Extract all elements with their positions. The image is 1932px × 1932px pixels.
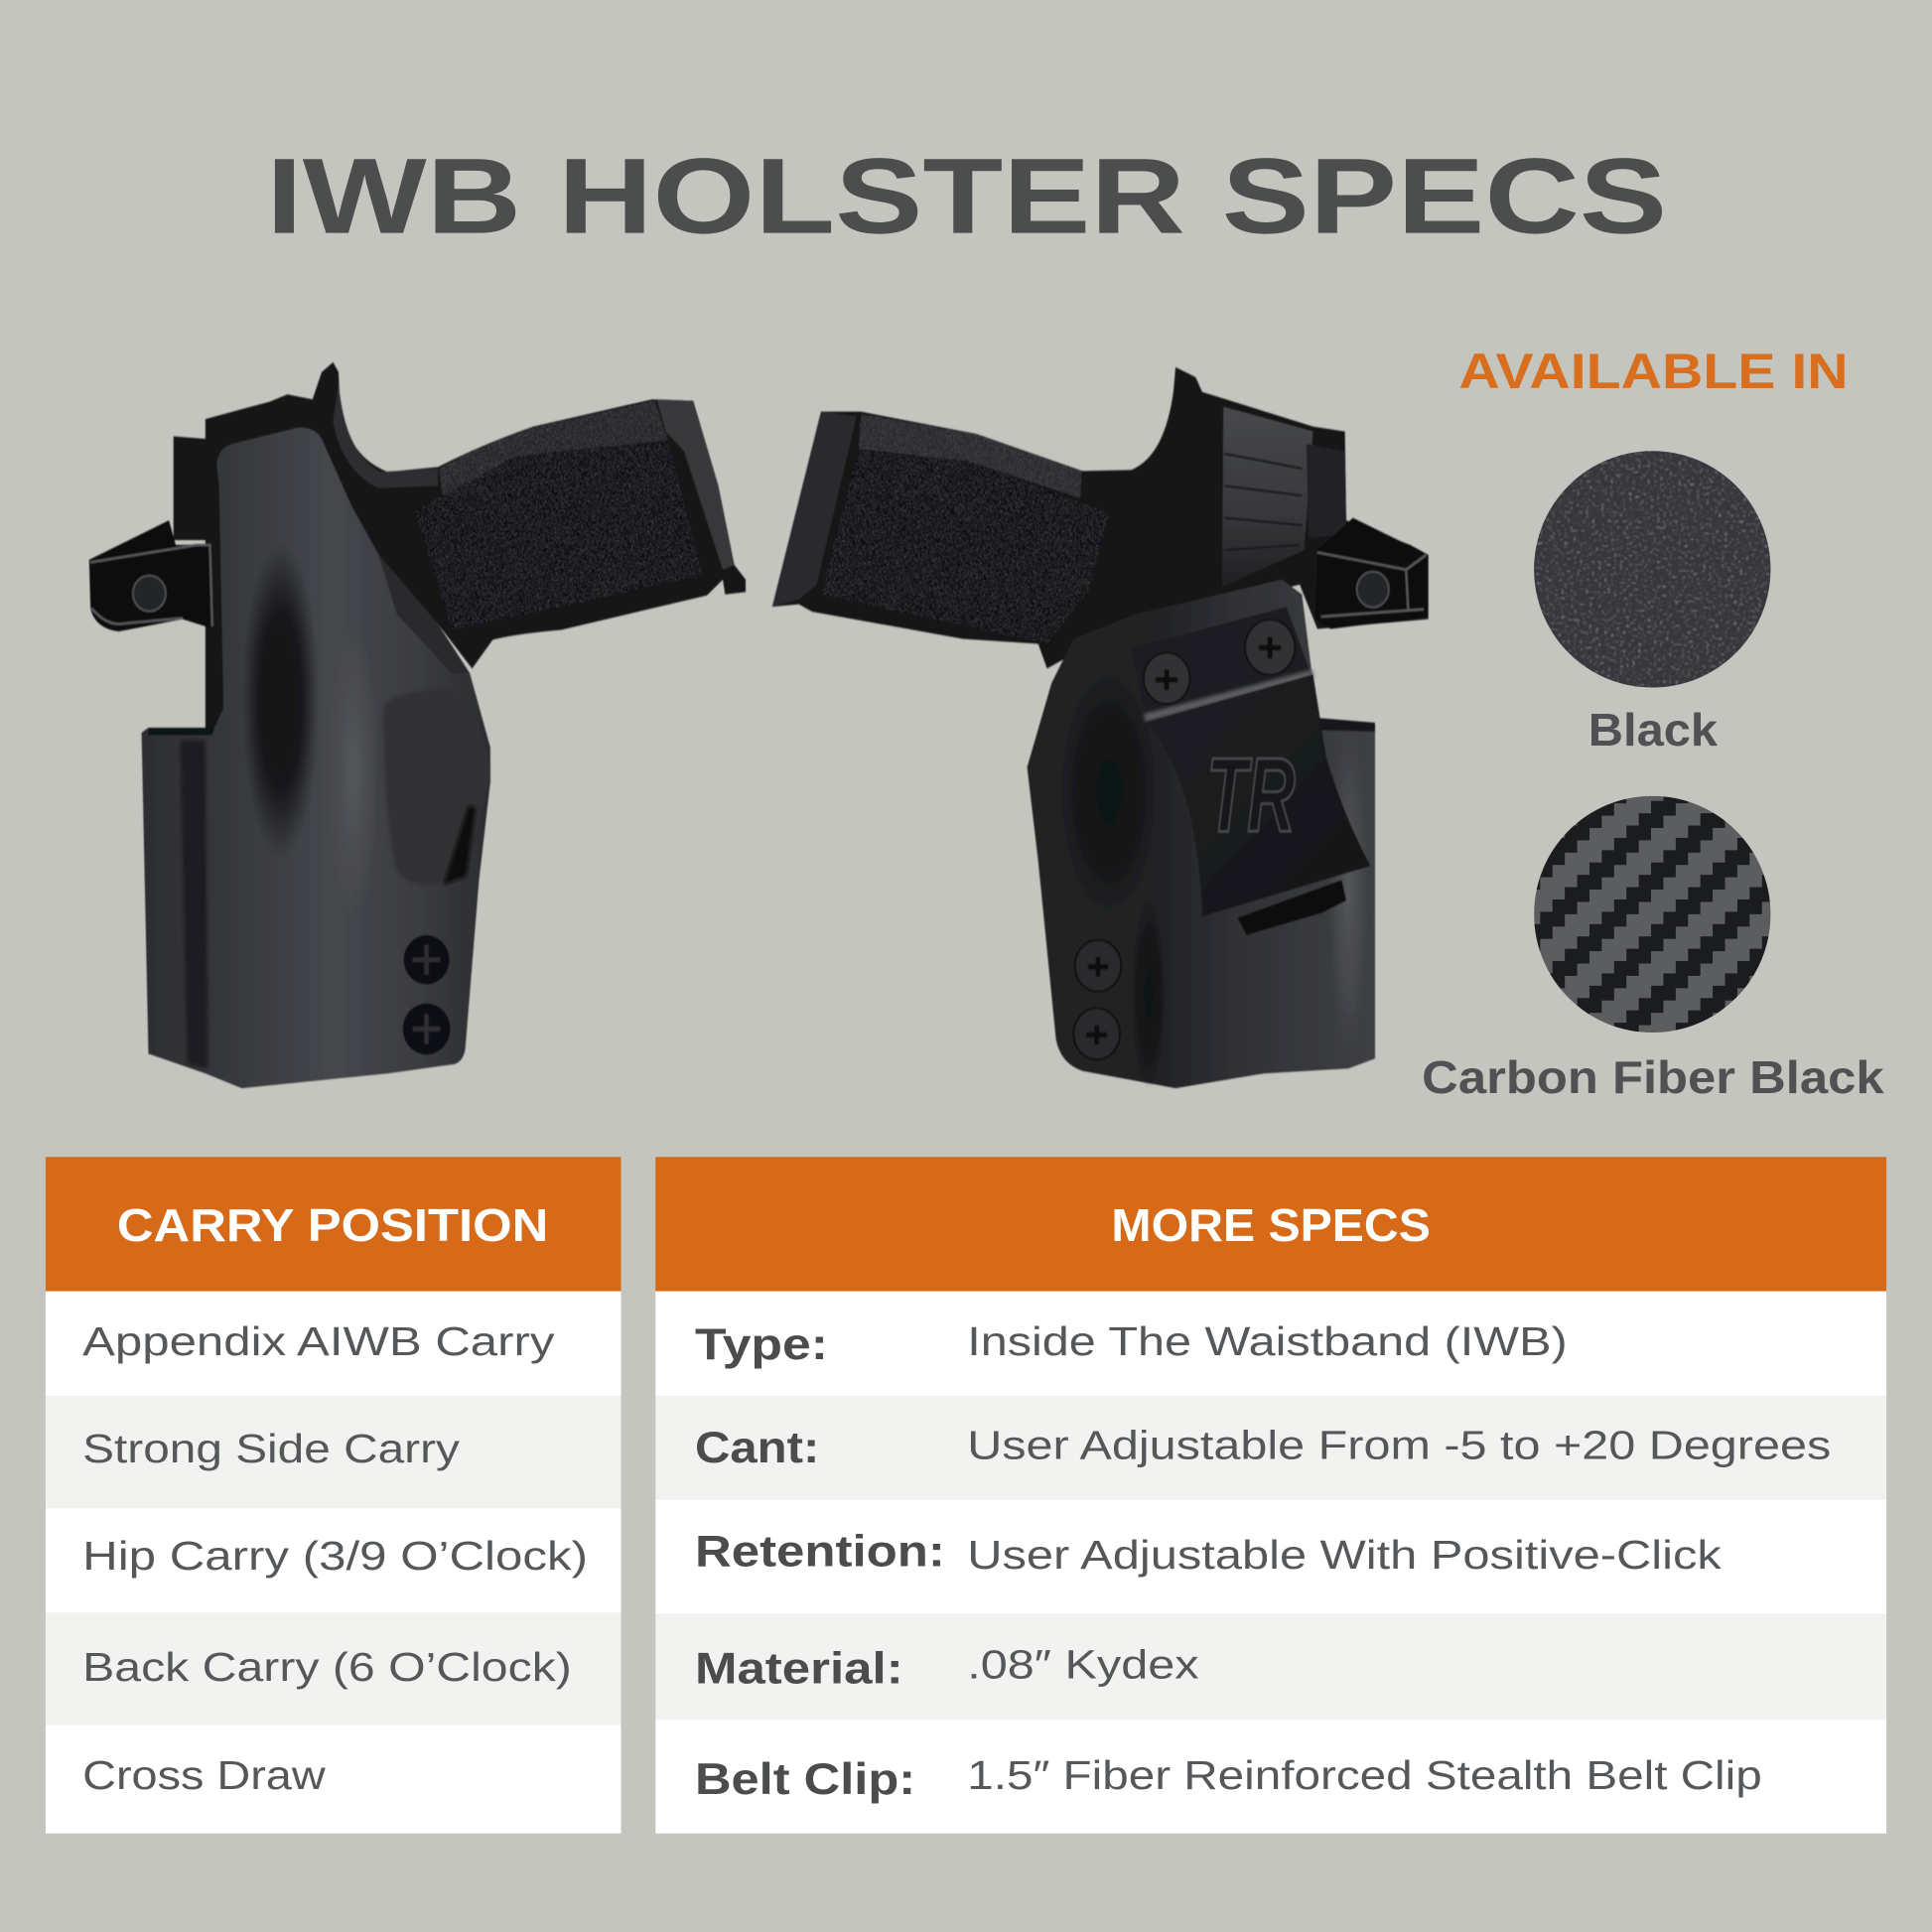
table header: more specs [655, 1157, 1886, 1292]
row: type: Inside The Waistband (IWB) [967, 1318, 1568, 1364]
table header: carry position [46, 1157, 621, 1292]
grip stippling panel [821, 450, 1109, 643]
row: type [655, 1292, 1886, 1396]
row: cant: Cant: [695, 1424, 819, 1472]
left holster and pistol: front view [89, 362, 746, 1088]
pistol slide with serrations [1222, 407, 1346, 587]
row: belt clip: Belt Clip: [695, 1755, 915, 1804]
swatch label: carbon fiber black: Carbon Fiber Black [1422, 1051, 1884, 1103]
panel: more specs table [655, 1157, 1886, 1834]
holster body [1028, 580, 1375, 1088]
row: back carry: Back Carry (6 O’Clock) [82, 1644, 572, 1690]
row: cross draw: Cross Draw [82, 1752, 326, 1798]
row: retention [655, 1499, 1886, 1614]
row: cant: User Adjustable From -5 to +20 Degrees [967, 1422, 1831, 1467]
clip slot [1238, 880, 1346, 935]
grip base plate [656, 399, 735, 570]
row: retention: Retention: [695, 1527, 945, 1576]
holster body [142, 428, 490, 1088]
table header: more specs: MORE SPECS [1111, 1199, 1431, 1251]
row: cant [655, 1396, 1886, 1499]
row: back carry [46, 1613, 621, 1725]
holster shading [1060, 673, 1375, 1088]
row: cross draw [46, 1725, 621, 1834]
row: belt clip [655, 1721, 1886, 1834]
swatch label: black: Black [1588, 704, 1719, 756]
holster screws [1073, 940, 1121, 1059]
row: appendix [46, 1292, 621, 1396]
row: material: Material: [695, 1644, 903, 1693]
holster rivets [403, 935, 450, 1054]
grip stippling panel [415, 442, 702, 630]
belt loop strap [89, 520, 213, 631]
right holster and pistol: back view with belt clip [772, 367, 1429, 1088]
grip base plate [772, 412, 857, 607]
swatch: black [1534, 451, 1770, 688]
panel: carry position table [46, 1157, 621, 1834]
title: IWB HOLSTER SPECS [266, 136, 1667, 256]
row: strong side: Strong Side Carry [82, 1426, 461, 1471]
row: belt clip: 1.5″ Fiber Reinforced Stealth Belt Clip [967, 1752, 1762, 1798]
belt clip mount [1131, 607, 1313, 718]
row: type: Type: [695, 1320, 828, 1369]
row: strong side [46, 1396, 621, 1508]
holster shading [148, 542, 488, 1068]
belt clip [1147, 674, 1371, 916]
clip logo: TR [1206, 736, 1296, 855]
upper grip stippling [859, 414, 1081, 498]
pistol frame and grip [772, 367, 1429, 668]
swatch: carbon fiber black [1534, 796, 1770, 1033]
row: material [655, 1614, 1886, 1721]
row: hip carry [46, 1508, 621, 1613]
trigger guard highlight [333, 382, 438, 488]
row: retention: User Adjustable With Positive-Click [967, 1532, 1722, 1578]
row: material: .08″ Kydex [967, 1641, 1199, 1687]
row: hip carry: Hip Carry (3/9 O’Clock) [82, 1533, 588, 1579]
pistol frame and grip [174, 362, 746, 728]
available in heading: AVAILABLE IN [1458, 344, 1849, 399]
upper grip stippling [439, 401, 668, 495]
belt loop strap [1315, 518, 1429, 629]
row: appendix: Appendix AIWB Carry [82, 1318, 555, 1364]
table header: carry position: CARRY POSITION [117, 1199, 548, 1251]
